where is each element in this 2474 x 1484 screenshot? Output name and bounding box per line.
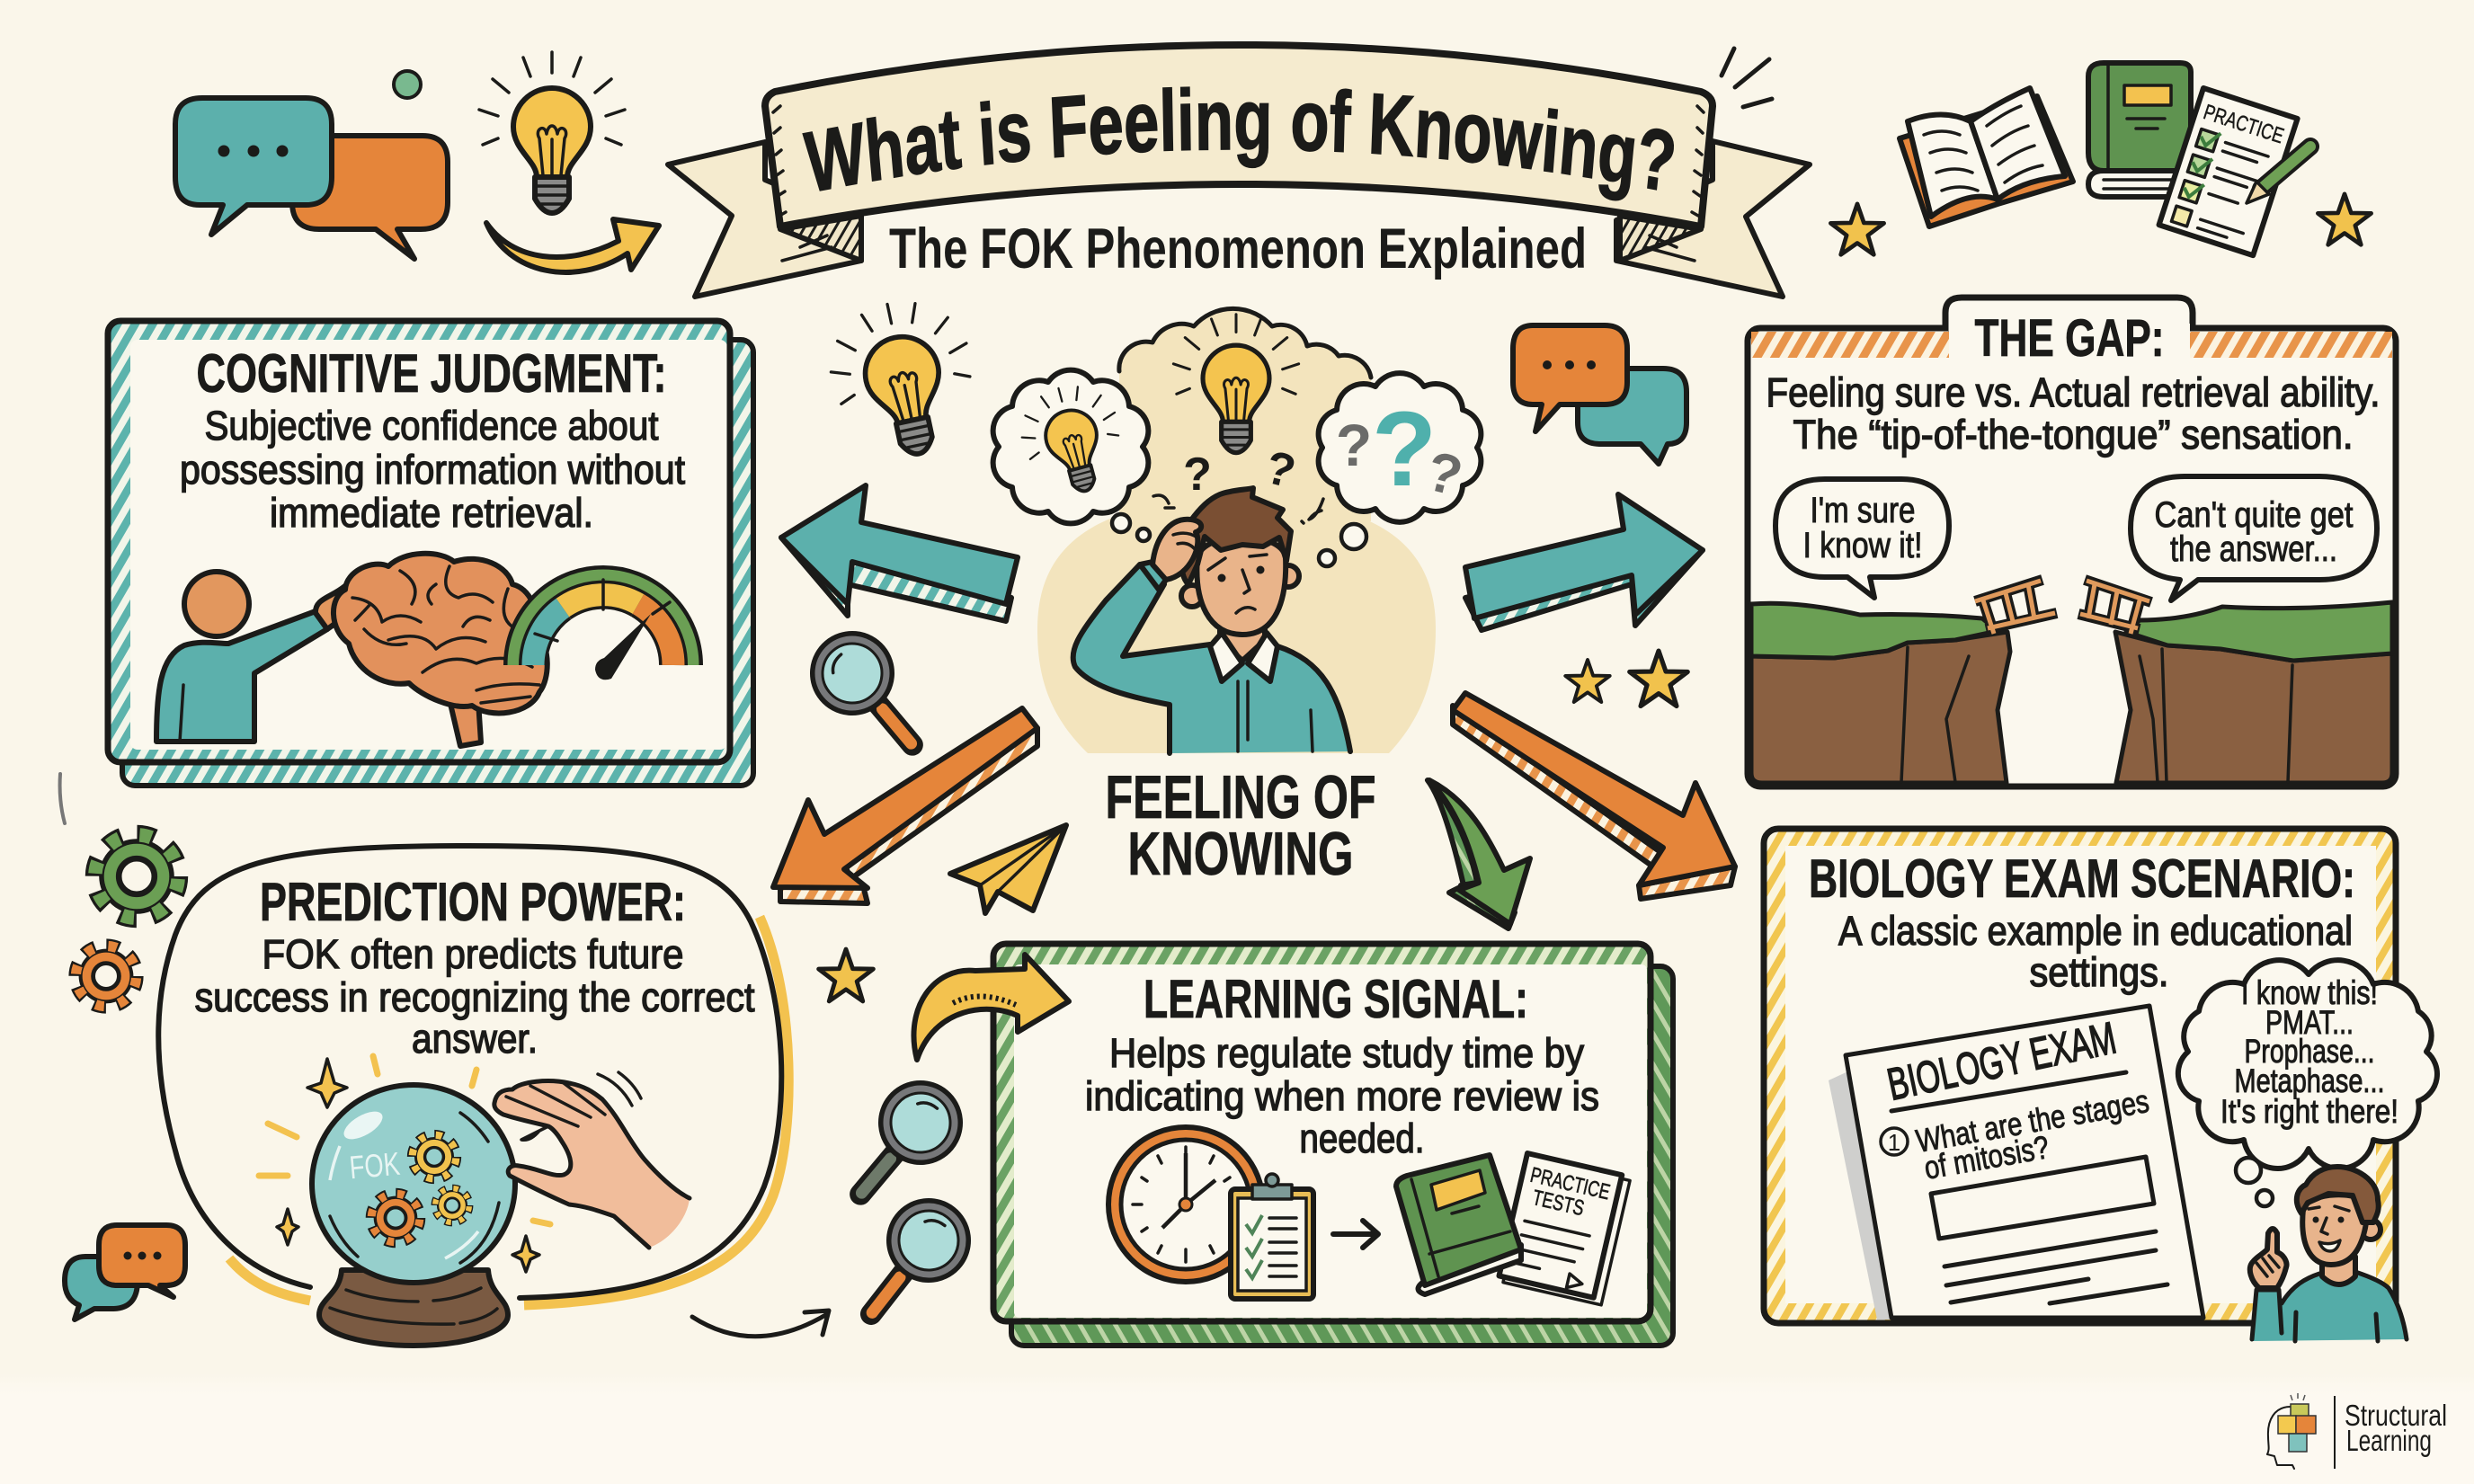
- thought cloud: right: [1319, 373, 1481, 522]
- icon: bulb centre left: [820, 289, 987, 468]
- thought cloud: recall: Metaphase...: [2235, 1062, 2384, 1099]
- background halo: [1037, 499, 1436, 753]
- panel: the gap: [1748, 298, 2396, 786]
- central label second line: KNOWING: [1127, 820, 1354, 888]
- description: [1766, 369, 2381, 458]
- person scratching head: [1073, 488, 1350, 753]
- panel: biology exam scenario: [1764, 829, 2437, 1341]
- icon: magnifier lower 1: [830, 1067, 976, 1220]
- question number: [1881, 1128, 1908, 1156]
- thought cloud: recall: I know this!: [2241, 974, 2378, 1011]
- central figure: feeling of knowing: [993, 308, 1481, 888]
- question marks: ?: [1183, 449, 1212, 501]
- title text: What is Feeling of Knowing?: [802, 86, 1674, 201]
- arrow: thin curved: [692, 1311, 829, 1337]
- icon: top left speech bubbles: [175, 98, 448, 259]
- speech bubble: can't quite: the answer...: [2170, 529, 2337, 569]
- thought cloud: recall: PMAT...: [2265, 1004, 2354, 1041]
- description: Helps regulate study time by: [1109, 1030, 1584, 1076]
- icon: star pair left: [1565, 660, 1610, 702]
- thought cloud: recall: [2178, 960, 2437, 1206]
- question number: 1: [1888, 1129, 1900, 1156]
- arrow: green down: [1428, 780, 1530, 929]
- arrow: teal right: [1465, 494, 1703, 630]
- description: Subjective confidence about: [205, 403, 659, 449]
- icon: person: [156, 572, 347, 742]
- description: The “tip-of-the-tongue” sensation.: [1793, 412, 2354, 458]
- illustration: broken bridge right: [2078, 580, 2151, 634]
- panel: cognitive judgment: [108, 321, 753, 786]
- icon: star top right 1: [1830, 204, 1884, 254]
- heading: PREDICTION POWER:: [260, 872, 686, 932]
- arrow: process: [1333, 1221, 1378, 1248]
- thought cloud: left: [993, 370, 1148, 523]
- person: student: [2250, 1167, 2407, 1341]
- icon: pencil: [2247, 147, 2310, 203]
- icon: left cloud bulb: [1012, 376, 1133, 503]
- logo head icon: [2267, 1393, 2316, 1469]
- illustration: right cliff: [2115, 602, 2392, 783]
- question marks: ?: [1420, 440, 1468, 509]
- description: settings.: [2030, 949, 2168, 995]
- subtitle: The FOK Phenomenon Explained: [889, 218, 1587, 280]
- question line 1: What are the stages: [1913, 1082, 2151, 1160]
- banner main ribbon: [765, 45, 1713, 227]
- logo word 1: Structural: [2345, 1399, 2447, 1432]
- logo: structural learning: [2267, 1393, 2447, 1469]
- stray mark: [60, 774, 65, 823]
- icon: clipboard: [1231, 1174, 1313, 1299]
- icon: hand: [494, 1072, 690, 1248]
- logo word 2: Learning: [2346, 1424, 2432, 1457]
- icon: paper plane: [950, 825, 1066, 913]
- speech bubble: sure: [1775, 479, 1949, 598]
- description: A classic example in educational: [1838, 908, 2353, 954]
- icon: green dot: [394, 71, 421, 98]
- practice tests label: PRACTICE: [1528, 1163, 1612, 1204]
- icon: centre bulb: [1173, 315, 1299, 453]
- icon: star top right 2: [2318, 194, 2372, 244]
- description: immediate retrieval.: [270, 490, 593, 536]
- speech bubble: can't quite: Can't quite get: [2154, 495, 2354, 535]
- thought cloud: centre: [1119, 308, 1371, 521]
- icon: green book: [2088, 63, 2191, 197]
- icon: practice sheet: [2159, 88, 2298, 255]
- arrow: yellow swoosh: [486, 219, 659, 272]
- speech-bubble outline: [158, 846, 781, 1298]
- yellow curved arrow: [913, 955, 1069, 1060]
- thought cloud: recall: It's right there!: [2220, 1093, 2398, 1130]
- speech bubble: sure: I know it!: [1803, 526, 1922, 565]
- icon: star pair right: [1630, 651, 1687, 706]
- illustration: broken bridge left: [1975, 580, 2057, 634]
- exam title: BIOLOGY EXAM: [1883, 1012, 2121, 1110]
- icon: crystal ball: [312, 1085, 515, 1283]
- description: FOK often predicts future: [263, 931, 683, 977]
- icon: open book: [1900, 88, 2073, 227]
- description: success in recognizing the correct: [194, 974, 755, 1020]
- heading: COGNITIVE JUDGMENT:: [196, 343, 667, 404]
- yellow offset edge: [229, 917, 788, 1305]
- speech bubble: can't quite: [2131, 476, 2377, 600]
- description: Feeling sure vs. Actual retrieval ability.: [1766, 369, 2381, 415]
- description: [180, 403, 685, 536]
- banner right fold: [1620, 216, 1701, 261]
- description: [1838, 908, 2353, 995]
- thought bubbles: [1112, 514, 1366, 566]
- heading: THE GAP:: [1974, 309, 2165, 368]
- chart: confidence gauge: [513, 575, 693, 680]
- practice label: PRACTICE: [2201, 100, 2287, 148]
- burst lines: [1722, 49, 1772, 107]
- icon: star lower centre: [819, 949, 873, 1001]
- description: indicating when more review is: [1085, 1073, 1599, 1119]
- banner left fold: [780, 216, 861, 261]
- question marks: ?: [1260, 441, 1301, 499]
- arrow: teal left: [781, 485, 1018, 621]
- heading tab: [1945, 298, 2193, 331]
- striped header band: [1751, 332, 2392, 358]
- illustration: left cliff: [1751, 603, 2010, 783]
- tests label: TESTS: [1530, 1186, 1587, 1221]
- description: [1085, 1030, 1599, 1161]
- arrow: orange down-right: [1453, 693, 1735, 899]
- heading: LEARNING SIGNAL:: [1144, 969, 1528, 1029]
- illustration: exam paper: [1829, 1006, 2203, 1320]
- arrow: orange down-left: [773, 708, 1037, 903]
- thought cloud: recall: Prophase...: [2244, 1033, 2375, 1070]
- title banner: [665, 41, 1812, 299]
- speech bubble: sure: I'm sure: [1811, 491, 1915, 530]
- icon: brain: [334, 554, 547, 746]
- icon: crystal ball stand: [319, 1270, 508, 1346]
- icon: centre speech bubbles: [1513, 325, 1686, 464]
- description: answer.: [412, 1016, 538, 1062]
- central label: FEELING OF: [1106, 763, 1375, 831]
- panel: prediction power: [158, 846, 788, 1346]
- question marks: ?: [1336, 412, 1372, 478]
- icon: crystal ball: FOK: [348, 1145, 401, 1186]
- banner left tail: [668, 142, 861, 297]
- banner right tail: [1616, 141, 1810, 297]
- question marks: [1183, 390, 1468, 509]
- sparkles: [277, 1059, 539, 1272]
- question marks: ?: [1372, 390, 1437, 509]
- question line 2: of mitosis?: [1921, 1128, 2051, 1186]
- icon: lower left speech bubbles: [65, 1225, 185, 1320]
- icon: clock: [1108, 1127, 1263, 1282]
- logo divider: [2334, 1396, 2336, 1469]
- icon: orange gear: [76, 946, 137, 1007]
- panel: learning signal: [993, 944, 1673, 1346]
- icon: green study book: [1396, 1155, 1521, 1294]
- icon: green gear: [95, 835, 178, 918]
- description: needed.: [1300, 1115, 1424, 1161]
- icon: top light bulb: [479, 52, 625, 213]
- description: [194, 931, 755, 1062]
- icon: magnifier lower 2: [840, 1185, 984, 1338]
- icon: practice tests sheet: [1498, 1153, 1631, 1305]
- description: possessing information without: [180, 447, 685, 493]
- icon: magnifier middle left: [796, 618, 943, 770]
